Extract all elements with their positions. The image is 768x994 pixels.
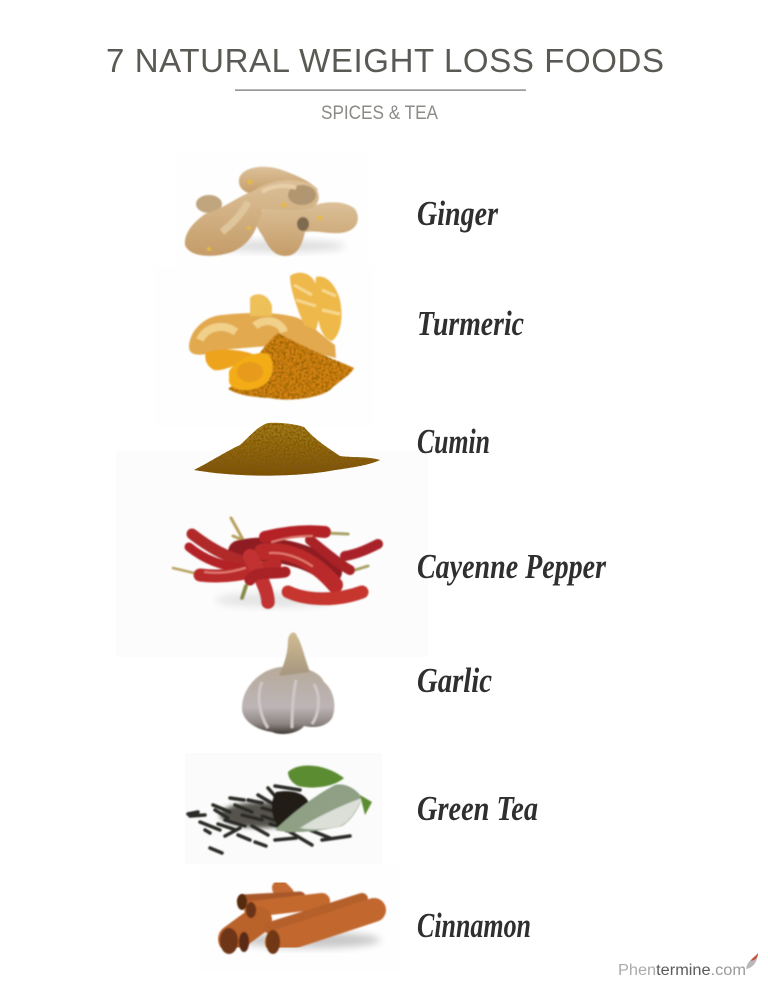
- logo: Phentermine.com: Phentermine.com: [618, 962, 746, 979]
- row: green tea: [188, 765, 538, 853]
- icon: cinnamon sticks: [220, 888, 380, 954]
- icon: logo feather: [746, 954, 758, 969]
- row: cayenne pepper: [173, 518, 606, 607]
- row: cumin: [194, 422, 490, 476]
- label: Cayenne Pepper: Cayenne Pepper: [417, 547, 606, 586]
- subtitle: SPICES & TEA: [321, 103, 438, 124]
- icon: garlic bulb: [242, 633, 334, 734]
- row: cinnamon: [220, 888, 531, 954]
- icon: turmeric root and powder: [189, 273, 354, 400]
- icon: tea leaves: [188, 765, 372, 853]
- logo: Phentermine.com: [618, 954, 758, 979]
- row: ginger: [185, 167, 498, 256]
- row: turmeric: [189, 273, 524, 400]
- icon: dried red chili peppers: [173, 518, 378, 607]
- label: Turmeric: Turmeric: [417, 304, 524, 343]
- label: Cumin: Cumin: [417, 422, 490, 461]
- row: garlic: [242, 633, 492, 734]
- title: 7 NATURAL WEIGHT LOSS FOODS: [106, 42, 664, 79]
- icon: ginger root: [185, 167, 358, 256]
- label: Garlic: Garlic: [417, 661, 492, 700]
- label: Green Tea: Green Tea: [417, 789, 538, 828]
- icon: cumin powder mound: [194, 423, 380, 476]
- label: Ginger: Ginger: [417, 194, 498, 233]
- label: Cinnamon: Cinnamon: [417, 906, 531, 945]
